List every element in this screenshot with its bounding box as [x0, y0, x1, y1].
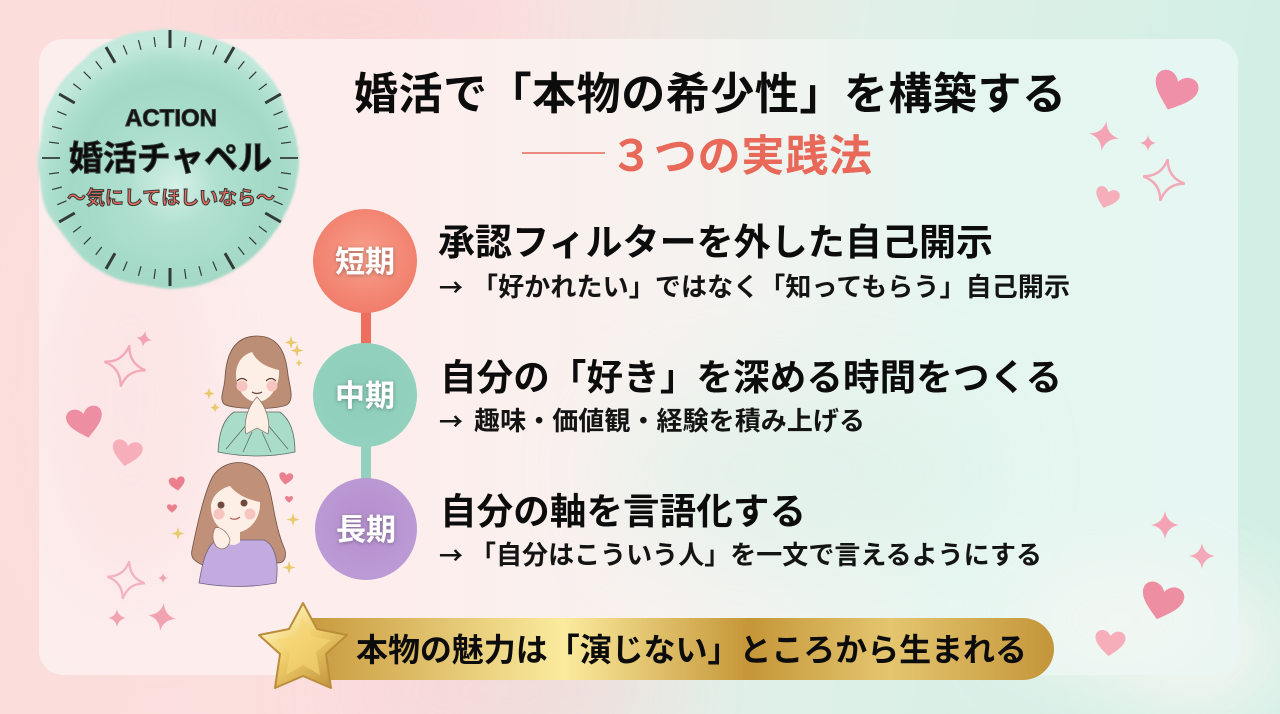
step: mid term: [313, 343, 1062, 447]
illustration: woman with long hair and hearts: [167, 462, 300, 586]
title: [354, 70, 1066, 181]
step heading: 承認フィルターを外した自己開示: [438, 222, 993, 263]
badge title: 婚活チャペル: [69, 140, 272, 178]
callout: gold banner: [259, 603, 1054, 688]
illustration: smiling woman with hands together: [204, 336, 304, 456]
timeline connector: short to mid: [361, 310, 371, 346]
step detail: 「好かれたい」ではなく「知ってもらう」自己開示: [472, 272, 1070, 302]
subtitle rule: [522, 152, 605, 154]
step heading: 自分の軸を言語化する: [440, 491, 806, 532]
step heading: 自分の「好き」を深める時間をつくる: [440, 357, 1062, 398]
step: short term: [313, 209, 1070, 313]
node: 短期: 短期: [335, 246, 395, 279]
icon: gold star: [259, 603, 347, 688]
step detail: 趣味・価値観・経験を積み上げる: [474, 406, 865, 436]
timeline connector: mid to long: [361, 444, 371, 480]
badge subtitle: ～気にしてほしいなら～: [67, 187, 275, 209]
step detail: 「自分はこういう人」を一文で言えるようにする: [470, 540, 1042, 570]
node: 長期: 長期: [336, 514, 396, 547]
title: 婚活で「本物の希少性」を構築する: [354, 70, 1066, 119]
subtitle: ３つの実践法: [610, 133, 872, 181]
decorations: top right hearts and sparkles: [1087, 67, 1201, 212]
step detail: →: [439, 536, 463, 571]
decorations: bottom right hearts and sparkles: [1094, 511, 1215, 658]
step detail: →: [439, 402, 463, 437]
node: 長期: [315, 478, 417, 580]
decorations: left side hearts and sparkles: [65, 330, 178, 633]
node: 短期: [313, 209, 417, 313]
step: long term: [315, 478, 1042, 580]
watercolor disc: [37, 29, 297, 289]
node: 中期: [313, 343, 417, 447]
node: 中期: 中期: [335, 380, 395, 413]
clock ticks: [42, 30, 298, 286]
callout text: 本物の魅力は「演じない」ところから生まれる: [356, 632, 1027, 668]
step detail: →: [439, 268, 463, 303]
badge label: ACTION: ACTION: [125, 105, 217, 132]
